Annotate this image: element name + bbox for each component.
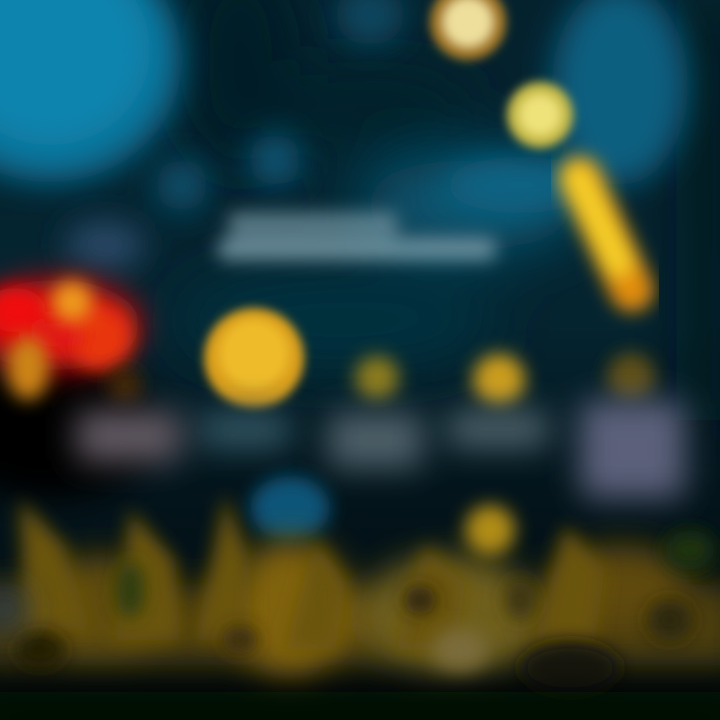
shape: top-left bright core xyxy=(0,0,150,145)
label 3 xyxy=(328,412,423,468)
second circle: yellow xyxy=(507,82,573,148)
shape: top-right blue mass xyxy=(335,0,688,213)
bottom dark strip xyxy=(0,588,720,720)
red blobs illustration xyxy=(0,280,143,403)
grass dark patches xyxy=(15,530,715,694)
label blocks xyxy=(76,400,685,498)
small circle 1 xyxy=(355,356,399,400)
small circle 2 xyxy=(473,354,525,406)
grass field xyxy=(0,495,720,694)
background glow: centre teal xyxy=(180,0,720,420)
small circle 3 xyxy=(607,353,655,401)
small yellow circle in grass xyxy=(465,505,515,555)
label 1 xyxy=(76,410,181,462)
dark zone left of title xyxy=(0,360,160,500)
top circle: pale yellow xyxy=(430,0,506,60)
large yellow circle xyxy=(204,308,304,408)
shape: top-left blue circle xyxy=(0,0,182,182)
yellow diagonal bar xyxy=(578,178,632,290)
label 2 xyxy=(200,412,290,448)
heading: blurred title xyxy=(218,212,496,260)
label 5 xyxy=(580,400,685,498)
decorative small blue blobs xyxy=(65,134,301,269)
blue blob at lower centre xyxy=(250,476,330,540)
label 4 xyxy=(448,410,548,448)
